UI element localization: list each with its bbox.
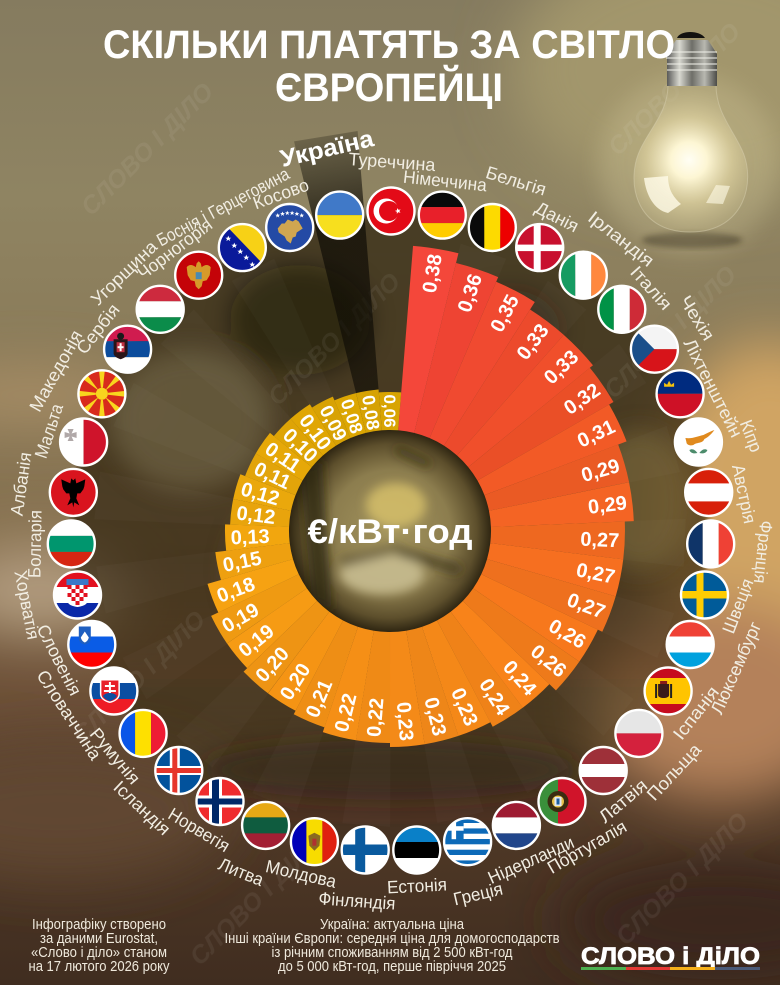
slice: Кіпр 0,29: 0,29 xyxy=(579,455,622,487)
flag: Туреччина xyxy=(367,187,415,235)
flag: Словенія xyxy=(68,620,116,668)
flag: Португалія xyxy=(538,778,586,826)
flag: Хорватія xyxy=(54,571,102,619)
flag: Люксембург xyxy=(666,620,714,668)
label: Швеція: Швеція xyxy=(718,576,758,636)
flag: Норвегія xyxy=(196,778,244,826)
slice: Туреччина 0,06: 0,06 xyxy=(380,394,399,428)
label: Фінляндія: Фінляндія xyxy=(318,888,396,914)
label: Чорногорія: Чорногорія xyxy=(134,215,216,283)
flag: Боснія і Герцеговина xyxy=(218,222,268,272)
label: Сербія: Сербія xyxy=(72,300,124,358)
slice: Литва 0,21: 0,21 xyxy=(302,677,337,721)
slice: Хорватія 0,15 xyxy=(215,537,294,580)
flag: Бельгія xyxy=(468,204,516,252)
flag: Ліхтенштейн xyxy=(656,370,704,418)
label: Кіпр: Кіпр xyxy=(736,417,766,455)
slice: Словенія 0,18 xyxy=(207,552,301,613)
flag: Іспанія xyxy=(644,667,692,715)
background photo: СЛОВО І ДІЛО xyxy=(185,827,329,971)
flags ring xyxy=(47,187,735,874)
source note xyxy=(28,916,170,975)
flag: Мальта xyxy=(60,418,108,466)
flag: Північна Македонія xyxy=(78,370,126,418)
slice: Норвегія 0,20 xyxy=(268,607,350,711)
slice: Угорщина 0,10: 0,10 xyxy=(278,424,322,467)
source note: на 17 лютого 2026 року xyxy=(28,958,170,975)
slice: Швеція 0,27: 0,27 xyxy=(574,559,617,589)
title: ЄВРОПЕЙЦІ xyxy=(275,64,503,110)
flag: Польща xyxy=(615,709,663,757)
flag: Косово xyxy=(266,204,314,252)
unit label: €/кВт·год xyxy=(308,513,472,551)
label: Косово: Косово xyxy=(250,175,312,213)
slice: Австрія 0,29: 0,29 xyxy=(587,492,628,519)
title xyxy=(103,23,675,110)
flag: Швеція xyxy=(680,571,728,619)
methodology note: до 5 000 кВт-год, перше півріччя 2025 xyxy=(278,958,506,975)
flag: Ісландія xyxy=(155,746,203,794)
flag: Кіпр xyxy=(674,418,722,466)
flag: Албанія xyxy=(49,468,97,516)
slice: Фінляндія 0,22: 0,22 xyxy=(363,697,388,738)
flag: Франція xyxy=(687,520,735,568)
slice: Ісландія 0,20 xyxy=(243,596,335,694)
flag: Словаччина xyxy=(90,667,138,715)
methodology note: із річним споживанням від 2 500 кВт-год xyxy=(272,944,513,961)
slice: Латвія 0,24: 0,24 xyxy=(498,657,541,701)
label: Хорватія: Хорватія xyxy=(11,569,43,641)
source note: за даними Eurostat, xyxy=(40,930,158,947)
flag: Болгарія xyxy=(47,520,95,568)
slice: Іспанія 0,26: 0,26 xyxy=(545,615,589,654)
source note: Інфографіку створено xyxy=(32,916,166,933)
slice: Македонія 0,11 xyxy=(245,453,304,499)
slice: Ірландія 0,33 xyxy=(434,309,564,463)
logo: Слово і діло: СЛОВО і ДіЛО xyxy=(581,943,760,970)
background photo: СЛОВО І ДІЛО xyxy=(611,807,755,951)
label: Франція: Франція xyxy=(750,520,776,584)
slice: Мальта 0,12: 0,12 xyxy=(238,478,282,510)
label: Польща: Польща xyxy=(643,739,706,804)
slice: Італія 0,33: 0,33 xyxy=(540,346,583,389)
label: Австрія: Австрія xyxy=(728,463,760,525)
slice: Італія 0,33 xyxy=(448,334,594,476)
slice: Молдова 0,22 xyxy=(323,625,382,741)
slice: Молдова 0,22: 0,22 xyxy=(331,691,362,734)
slice: Португалія 0,24: 0,24 xyxy=(474,675,514,720)
title: СКІЛЬКИ ПЛАТЯТЬ ЗА СВІТЛО xyxy=(103,23,675,67)
label: Німеччина: Німеччина xyxy=(402,167,489,195)
label: Греція: Греція xyxy=(451,879,505,909)
flag: Естонія xyxy=(393,826,441,874)
label: Македонія: Македонія xyxy=(25,327,87,415)
background photo: СЛОВО І ДІЛО xyxy=(603,17,747,161)
label: Ірландія: Ірландія xyxy=(584,207,658,271)
slice: Фінляндія 0,22 xyxy=(356,630,399,744)
slice: Ліхтенштейн 0,31: 0,31 xyxy=(574,416,619,452)
slice: Франція 0,27 xyxy=(490,516,626,559)
radial bar chart: €/кВт-год xyxy=(207,245,635,748)
label: Італія: Італія xyxy=(626,262,676,314)
slice: Сербія 0,11: 0,11 xyxy=(261,438,304,478)
slice: Естонія 0,23 xyxy=(381,630,425,748)
flag: Угорщина xyxy=(136,285,184,333)
methodology note: Україна: актуальна ціна xyxy=(320,916,465,933)
slice: Боснія і Герцеговина 0,09: 0,09 xyxy=(315,402,350,445)
label: Боснія і Герцеговина: Боснія і Герцеговина xyxy=(153,163,293,250)
label: Данія: Данія xyxy=(532,198,582,236)
slice: Бельгія 0,36: 0,36 xyxy=(454,271,487,315)
flag: Фінляндія xyxy=(341,826,389,874)
slice: Ірландія 0,33: 0,33 xyxy=(513,320,554,364)
label: Норвегія: Норвегія xyxy=(165,804,233,856)
flag: Литва xyxy=(242,801,290,849)
slice: Ісландія 0,20: 0,20 xyxy=(252,643,294,687)
methodology note xyxy=(224,916,560,975)
slice: Словаччина 0,19: 0,19 xyxy=(218,599,263,638)
flag: Італія xyxy=(598,285,646,333)
label: Нідерланди: Нідерланди xyxy=(485,832,577,888)
label: Португалія: Португалія xyxy=(544,816,630,878)
slice: Чехія 0,32 xyxy=(461,367,614,491)
methodology note: Інші країни Європи: середня ціна для домогосподарств xyxy=(224,930,560,947)
country labels xyxy=(7,125,776,914)
label: Молдова: Молдова xyxy=(264,856,339,892)
flag: Румунія xyxy=(119,709,167,757)
label: Україна: Україна xyxy=(278,125,377,173)
slice: Литва 0,21 xyxy=(293,617,366,728)
slice: Естонія 0,23: 0,23 xyxy=(392,701,417,742)
background photo: СЛОВО І ДІЛО xyxy=(76,77,220,221)
slice: Швеція 0,27 xyxy=(485,533,624,597)
label: Бельгія: Бельгія xyxy=(483,162,549,200)
label: Албанія: Албанія xyxy=(7,451,35,517)
highlight wedge: Україна xyxy=(294,131,399,396)
flag: Чорногорія xyxy=(175,251,223,299)
label: Болгарія: Болгарія xyxy=(24,510,46,578)
background photo: СЛОВО І ДІЛО xyxy=(68,605,212,749)
slice: Болгарія 0,13 xyxy=(225,522,290,551)
flag: Ірландія xyxy=(559,251,607,299)
label: Ісландія: Ісландія xyxy=(110,777,174,839)
slice: Албанія 0,12: 0,12 xyxy=(235,502,277,529)
background photo: СЛОВО І ДІЛО xyxy=(599,260,743,404)
label: Словенія: Словенія xyxy=(33,621,85,699)
flag: Молдова xyxy=(290,818,338,866)
slice: Франція 0,27: 0,27 xyxy=(580,529,620,552)
flag: Австрія xyxy=(685,468,733,516)
label: Словаччина: Словаччина xyxy=(33,666,106,764)
slice: Польща 0,26: 0,26 xyxy=(526,641,570,682)
label: Естонія: Естонія xyxy=(387,874,447,898)
slice: Нідерланди 0,23 xyxy=(413,617,491,737)
label: Латвія: Латвія xyxy=(595,775,651,827)
flag: Україна xyxy=(316,191,364,239)
slice: Норвегія 0,20: 0,20 xyxy=(276,660,315,704)
slice: Німеччина 0,38: 0,38 xyxy=(419,253,447,295)
slice: Македонія 0,11: 0,11 xyxy=(250,458,294,494)
slice: Болгарія 0,13: 0,13 xyxy=(230,526,270,549)
slice: Румунія 0,19: 0,19 xyxy=(235,620,279,662)
slice: Чехія 0,32: 0,32 xyxy=(560,379,605,420)
background photo: СЛОВО І ДІЛО xyxy=(263,267,407,411)
slice: Ліхтенштейн 0,31 xyxy=(472,404,627,506)
slice: Данія 0,35 xyxy=(417,281,535,452)
label: Румунія: Румунія xyxy=(86,724,144,788)
slice: Сербія 0,11 xyxy=(255,433,314,484)
slice: Бельгія 0,36 xyxy=(401,262,498,443)
icon: light bulb xyxy=(599,32,779,255)
slice: Албанія 0,12 xyxy=(230,499,292,532)
slice: Німеччина 0,38 xyxy=(383,245,459,435)
flag: Чехія xyxy=(630,325,678,373)
slice: Чорногорія 0,10 xyxy=(290,404,339,458)
slice: Португалія 0,24 xyxy=(429,607,523,727)
slice: Данія 0,35: 0,35 xyxy=(486,291,524,336)
slice: Польща 0,26 xyxy=(456,580,580,691)
slice: Мальта 0,12 xyxy=(233,474,297,515)
slice: Україна 0,08: 0,08 xyxy=(358,394,383,431)
slice: Чорногорія 0,10: 0,10 xyxy=(294,410,335,455)
slice: Румунія 0,19 xyxy=(227,582,322,669)
flag: Німеччина xyxy=(418,191,466,239)
slice: Латвія 0,24 xyxy=(443,595,550,708)
source note: «Слово і діло» станом xyxy=(31,944,167,961)
label: Литва: Литва xyxy=(215,854,267,890)
slice: Нідерланди 0,23: 0,23 xyxy=(446,685,482,729)
slice: Косово 0,08: 0,08 xyxy=(337,396,367,436)
slice: Словаччина 0,19 xyxy=(211,568,311,644)
label: Мальта: Мальта xyxy=(31,400,67,461)
label: Чехія: Чехія xyxy=(676,292,718,344)
slice: Люксембург 0,27 xyxy=(477,549,616,632)
label: Люксембург: Люксембург xyxy=(707,618,765,717)
slice: Кіпр 0,29 xyxy=(481,444,630,522)
label: Іспанія: Іспанія xyxy=(669,682,723,744)
flag: Сербія xyxy=(104,325,152,373)
slice: Хорватія 0,15: 0,15 xyxy=(221,548,264,577)
slice: Греція 0,23 xyxy=(397,625,459,745)
label: Угорщина: Угорщина xyxy=(87,236,162,309)
slice: Австрія 0,29 xyxy=(488,482,635,538)
flag: Латвія xyxy=(579,746,627,794)
slice: Іспанія 0,26 xyxy=(468,565,598,662)
flag: Греція xyxy=(444,818,492,866)
slice: Греція 0,23: 0,23 xyxy=(419,695,450,738)
flag: Нідерланди xyxy=(492,801,540,849)
label: Ліхтенштейн: Ліхтенштейн xyxy=(680,335,746,441)
flag: Данія xyxy=(516,224,564,272)
label: Туреччина: Туреччина xyxy=(348,149,437,175)
slice: Словенія 0,18: 0,18 xyxy=(214,573,258,608)
slice: Угорщина 0,10 xyxy=(273,418,326,470)
slice: Люксембург 0,27: 0,27 xyxy=(564,589,608,624)
